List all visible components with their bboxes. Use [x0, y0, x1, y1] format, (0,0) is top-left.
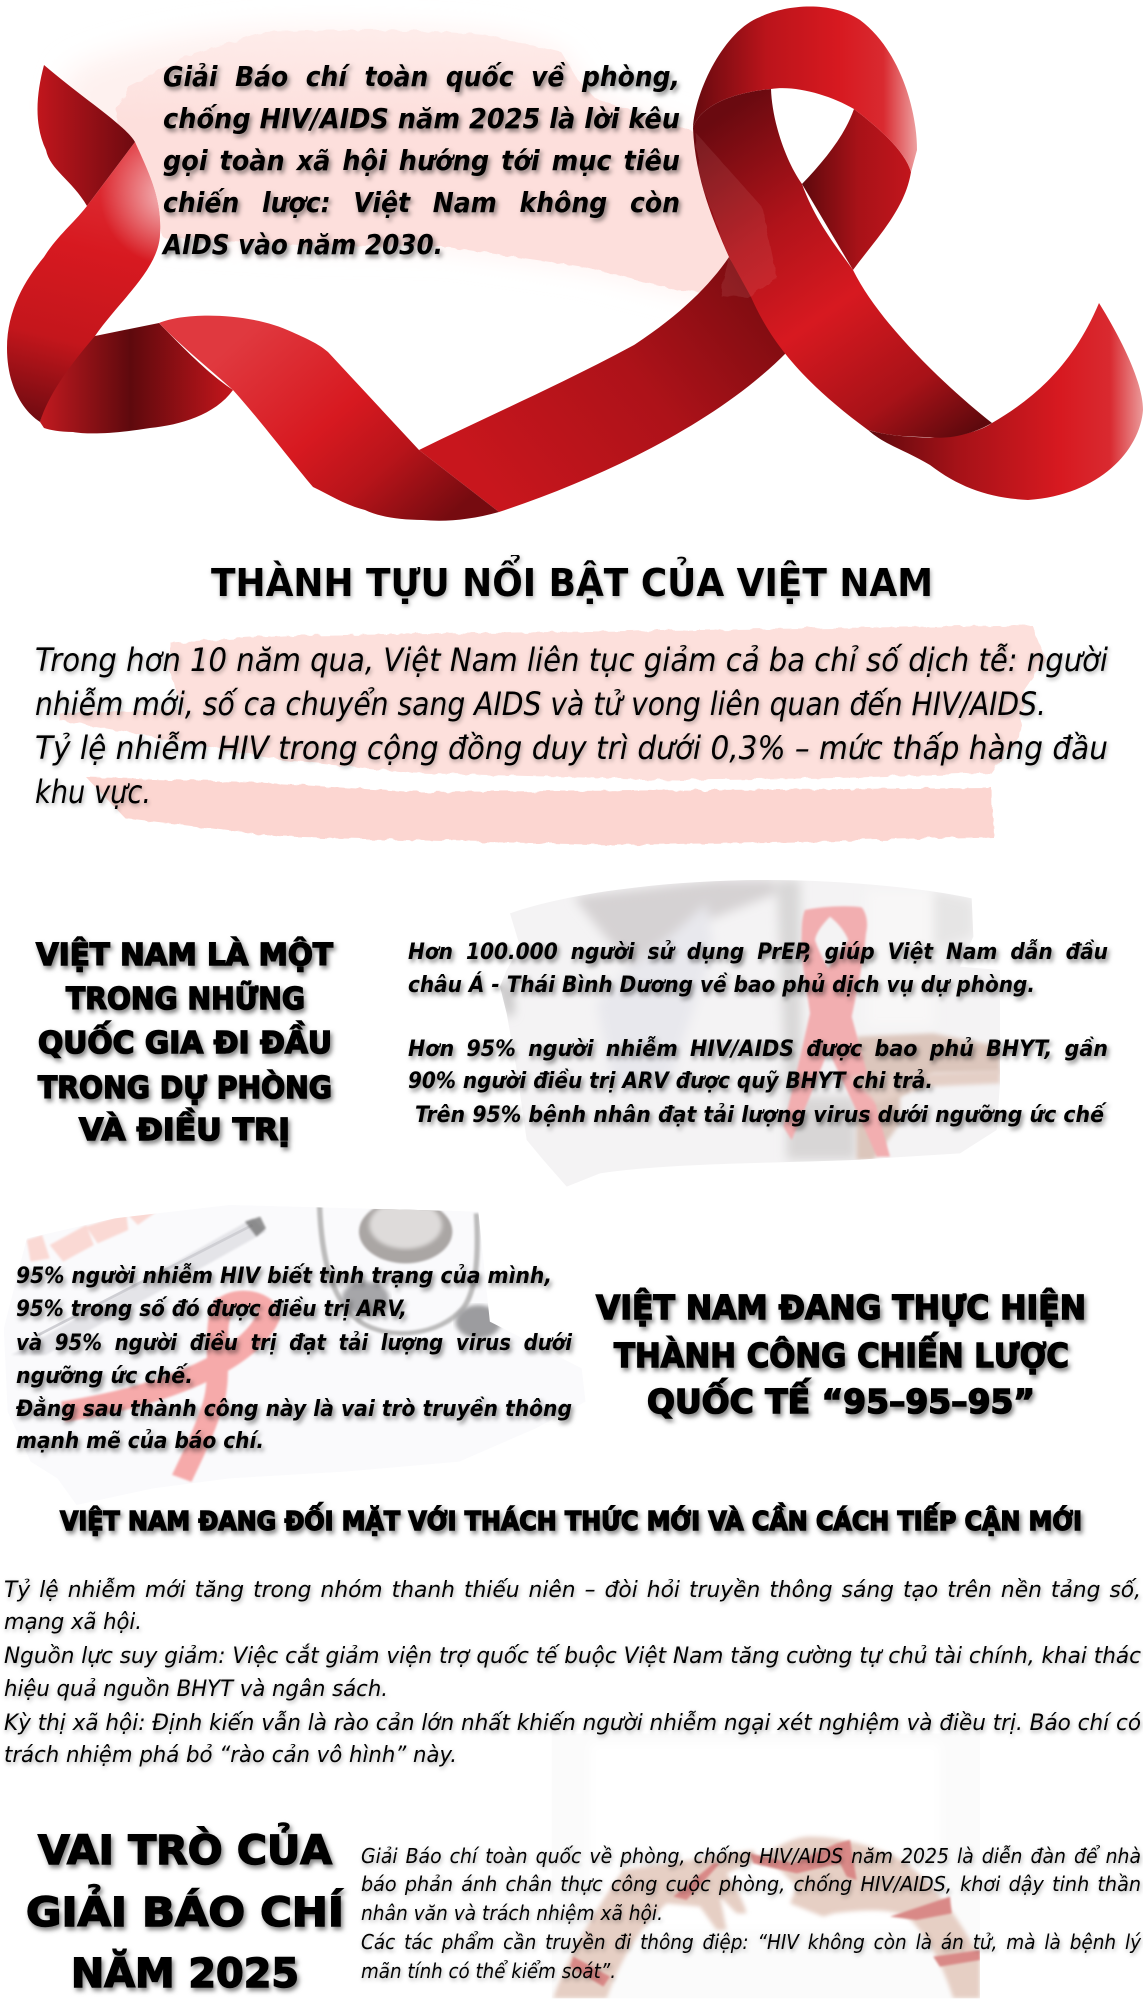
achievements paragraph: Tỷ lệ nhiễm HIV trong cộng đồng duy trì dưới 0,3% – mức thấp hàng đầu — [35, 729, 1108, 767]
heading: leading country: TRONG DỰ PHÒNG — [38, 1069, 332, 1106]
photo: doctor coat with red ribbon — [500, 870, 1000, 1200]
achievements paragraph: Trong hơn 10 năm qua, Việt Nam liên tục giảm cả ba chỉ số dịch tễ: người — [35, 641, 1108, 679]
text: 95-95-95 facts: ngưỡng ức chế. — [16, 1362, 193, 1389]
text: role of the award body — [361, 1843, 1142, 1983]
heading: 95-95-95 strategy: QUỐC TẾ “95–95–95” — [647, 1376, 1035, 1421]
text: 95-95-95 facts: 95% người nhiễm HIV biết tình trạng của mình, — [16, 1262, 552, 1289]
heading: leading country — [36, 936, 334, 1148]
text: 95-95-95 facts: Đằng sau thành công này là vai trò truyền thông — [15, 1395, 572, 1422]
text: 95-95-95 facts: và 95% người điều trị đạt tải lượng virus dưới — [16, 1329, 573, 1356]
text: new challenges body: trách nhiệm phá bỏ “rào cản vô hình” này. — [4, 1742, 457, 1768]
heading: leading country: QUỐC GIA ĐI ĐẦU — [38, 1020, 332, 1061]
text: prevention and treatment facts: Trên 95% bệnh nhân đạt tải lượng virus dưới ngưỡng ức chế — [415, 1101, 1107, 1128]
text: prevention and treatment facts: Hơn 95% người nhiễm HIV/AIDS được bao phủ BHYT, gần — [408, 1035, 1108, 1062]
text: new challenges body: Nguồn lực suy giảm: Việc cắt giảm viện trợ quốc tế buộc Việt Nam tăng cường tự chủ tài chính, khai thác — [4, 1642, 1141, 1669]
achievements paragraph: nhiễm mới, số ca chuyển sang AIDS và tử vong liên quan đến HIV/AIDS. — [35, 685, 1046, 723]
hero brush stroke — [60, 29, 777, 298]
heading: role of the 2025 award — [26, 1821, 344, 1997]
heading: leading country: VIỆT NAM LÀ MỘT — [36, 936, 334, 973]
hero text: chiến lược: Việt Nam không còn — [163, 186, 680, 219]
text: role of the award body: Các tác phẩm cần truyền đi thông điệp: “HIV không còn là án tử, mà là bệnh lý — [361, 1930, 1142, 1954]
text: 95-95-95 facts: mạnh mẽ của báo chí. — [16, 1428, 264, 1454]
text: new challenges body: Tỷ lệ nhiễm mới tăng trong nhóm thanh thiếu niên – đòi hỏi truyền thông sáng tạo trên nền tảng số, — [4, 1576, 1141, 1603]
text: prevention and treatment facts: châu Á - Thái Bình Dương về bao phủ dịch vụ dự phòng. — [408, 970, 1035, 998]
achievements paragraph — [35, 641, 1108, 811]
red ribbon — [7, 6, 1143, 521]
hero text: chống HIV/AIDS năm 2025 là lời kêu — [163, 102, 680, 135]
text: new challenges body: hiệu quả nguồn BHYT và ngân sách. — [4, 1676, 388, 1702]
heading: role of the 2025 award: NĂM 2025 — [71, 1948, 299, 1997]
hero text: Giải Báo chí toàn quốc về phòng, — [163, 60, 680, 93]
text: 95-95-95 facts — [15, 1262, 573, 1454]
photo: keyboard, pen, stethoscope and ribbon — [12, 1207, 504, 1483]
hero text: gọi toàn xã hội hướng tới mục tiêu — [163, 144, 680, 177]
hero text — [161, 60, 680, 261]
text: role of the award body: nhân văn và trách nhiệm xã hội. — [361, 1901, 663, 1925]
text: prevention and treatment facts: 90% người điều trị ARV được quỹ BHYT chi trả. — [408, 1067, 933, 1094]
achievements brush strokes — [59, 625, 1046, 845]
heading: role of the 2025 award: GIẢI BÁO CHÍ — [26, 1883, 344, 1936]
text: prevention and treatment facts — [408, 938, 1108, 1128]
text: new challenges body: Kỳ thị xã hội: Định kiến vẫn là rào cản lớn nhất khiến người nhiễm ngại xét nghiệm và điều trị. Báo chí có — [4, 1709, 1141, 1736]
heading: role of the 2025 award: VAI TRÒ CỦA — [38, 1821, 332, 1874]
text: role of the award body: mãn tính có thể kiểm soát”. — [361, 1959, 616, 1983]
heading: 95-95-95 strategy: VIỆT NAM ĐANG THỰC HIỆN — [596, 1287, 1086, 1327]
text: 95-95-95 facts: 95% trong số đó được điều trị ARV, — [16, 1295, 407, 1322]
text: new challenges body: mạng xã hội. — [4, 1609, 142, 1635]
text: new challenges body — [4, 1576, 1141, 1768]
heading: leading country: TRONG NHỮNG — [66, 980, 305, 1017]
heading: 95-95-95 strategy — [596, 1287, 1086, 1421]
achievements paragraph: khu vực. — [35, 773, 151, 811]
text: role of the award body: Giải Báo chí toàn quốc về phòng, chống HIV/AIDS năm 2025 là diễn đàn để nhà — [361, 1843, 1141, 1868]
hero text: AIDS vào năm 2030. — [161, 228, 443, 261]
photo: hands with red ribbon — [552, 1834, 980, 1998]
text: role of the award body: báo phản ánh chân thực công cuộc phòng, chống HIV/AIDS, khơi dậy tinh thần — [361, 1872, 1141, 1896]
section title: THÀNH TỰU NỔI BẬT CỦA VIỆT NAM — [211, 555, 933, 605]
text: prevention and treatment facts: Hơn 100.000 người sử dụng PrEP, giúp Việt Nam dẫn đầu — [408, 938, 1108, 965]
heading: leading country: VÀ ĐIỀU TRỊ — [79, 1108, 290, 1148]
heading: 95-95-95 strategy: THÀNH CÔNG CHIẾN LƯỢC — [614, 1331, 1069, 1375]
